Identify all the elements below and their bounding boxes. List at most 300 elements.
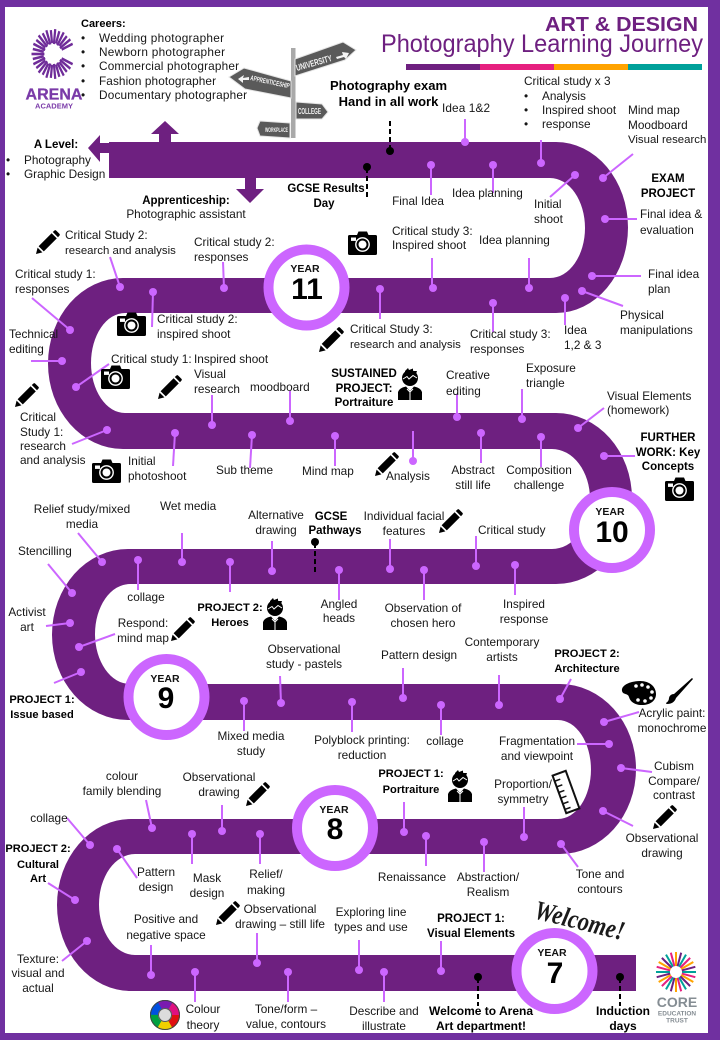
stop: Observational drawing (Year 8) — [183, 770, 255, 835]
stop: Final idea plan — [588, 267, 700, 296]
text block: careers: Documentary photographer — [99, 88, 247, 102]
stop: Critical study 3 inspired shoot: Critical study 3: — [392, 224, 473, 238]
stop: Final idea plan: Final idea — [648, 267, 699, 281]
stop: Colour theory: Colour — [186, 1002, 220, 1016]
stop: Final idea & evaluation: Final idea & — [640, 207, 702, 221]
heading: Sustained Project Portraiture: PROJECT: — [336, 383, 392, 395]
heading: Sustained Project Portraiture: SUSTAINED — [331, 368, 397, 380]
A Level pathway: Graphic Design — [24, 167, 105, 181]
stop: Project 1 Issue based: Issue based — [10, 709, 74, 721]
stop: Inspired shoot, Visual research: Inspired shoot — [194, 352, 268, 366]
stop: Critical study 3 inspired shoot: Inspired shoot — [392, 238, 467, 252]
stop: Cubism Compare/contrast — [617, 759, 701, 802]
stop: Observational study pastels: Observational — [268, 642, 340, 656]
stop: Describe and illustrate — [349, 968, 419, 1033]
stop: Further Work Key Concepts — [600, 432, 701, 473]
Year 10 badge — [574, 492, 650, 568]
stop: Initial photoshoot: photoshoot — [128, 469, 187, 483]
stop: Visual Elements (homework): (homework) — [607, 403, 669, 417]
logo: Arena Academy: ARENA — [26, 86, 83, 104]
icon: camera — [665, 478, 694, 501]
stop: Inspired response: response — [500, 612, 549, 626]
stop: Tone and contours: Tone and — [576, 867, 624, 881]
stop: Final idea plan: plan — [648, 282, 670, 296]
stop: Mind map, Moodboard, Visual research: Visual research — [628, 134, 706, 146]
stop: Inspired response — [500, 561, 549, 626]
stop: Polyblock printing — [314, 698, 410, 762]
milestone: GCSE Results Day: GCSE Results — [287, 183, 365, 195]
stop: Tone and contours — [557, 840, 624, 896]
Year 7 badge: YEAR — [537, 947, 567, 959]
stop: Critical Study 1 research and analysis: Study 1: — [20, 425, 63, 439]
stop: Further Work Key Concepts: FURTHER — [641, 432, 695, 444]
stop: Critical study x 3: Inspired shoot — [542, 103, 617, 117]
stop: Exploring line types and use: types and use — [334, 920, 408, 934]
stop: Polyblock printing: Polyblock printing: — [314, 733, 410, 747]
stop: Cubism Compare/contrast: contrast — [653, 788, 696, 802]
stop: collage (Year 9 bottom) — [426, 701, 464, 748]
stop: Critical study x 3: • — [524, 103, 528, 117]
text block: careers: • — [81, 74, 85, 88]
icon: pencil — [246, 782, 270, 806]
stop: Critical study 2 inspired shoot — [149, 288, 238, 341]
stop: Critical Study 3 research and analysis: research and analysis — [350, 339, 461, 351]
stop: Individual facial features: Individual facial — [364, 509, 444, 523]
Year 11 badge: YEAR — [290, 263, 320, 275]
stop: Exploring line types and use — [334, 905, 408, 974]
stop: collage (Year 8) — [30, 811, 94, 849]
stop: Contemporary artists: artists — [486, 650, 518, 664]
stop: Project 1 Issue based — [9, 668, 85, 721]
icon: pencil — [216, 901, 240, 925]
stop: Idea planning (upper) — [479, 233, 550, 292]
heading: Exam Project: EXAM — [651, 173, 685, 185]
stop: Idea 1,2 & 3: 1,2 & 3 — [564, 338, 602, 352]
stop: Tone/form value, contours: Tone/form – — [255, 1002, 317, 1016]
stop: Stencilling — [18, 544, 76, 597]
stop: Idea planning (upper): Idea planning — [479, 233, 550, 247]
logo: Arena Academy: ACADEMY — [35, 102, 73, 110]
stop: Activist art: art — [20, 620, 35, 634]
stop: Proportion/symmetry — [494, 777, 553, 841]
stop: Abstraction/Realism: Abstraction/ — [457, 870, 519, 884]
stop: Fragmentation and viewpoint — [499, 734, 613, 763]
stop: Relief study/mixed media — [34, 502, 130, 566]
Year 8 badge — [297, 790, 373, 866]
icon: palette — [622, 681, 656, 705]
stop: Project 2 Architecture: PROJECT 2: — [554, 648, 620, 660]
milestone: Photography exam: Photography exam — [330, 78, 447, 93]
heading: Exam Project: PROJECT — [641, 188, 695, 200]
stop: Observational drawing (right) — [599, 807, 698, 860]
stop: Exposure triangle: Exposure — [526, 361, 576, 375]
stop: Individual facial features: features — [383, 524, 425, 538]
stop: Creative editing — [446, 368, 490, 421]
stop: Tone/form value, contours — [246, 968, 326, 1031]
stop: Alternative drawing — [248, 508, 304, 575]
icon: pencil — [36, 230, 60, 254]
stop: Final Idea — [392, 161, 444, 208]
Year 8 badge: YEAR — [319, 804, 349, 816]
stop: collage (Year 9 top) — [127, 556, 165, 604]
icon: camera — [117, 312, 146, 336]
stop: Visual Elements (homework): Visual Elements — [607, 389, 691, 403]
stop: Positive and negative space: negative space — [126, 928, 206, 942]
stop: Angled heads: Angled — [321, 597, 357, 611]
stop: Observational drawing (Year 8): Observational — [183, 770, 255, 784]
stop: colour family blending: family blending — [83, 784, 161, 798]
stop: Observation of chosen hero: Observation of — [385, 601, 461, 615]
stop: Abstract still life: Abstract — [451, 463, 495, 477]
icon: signpost: WORKPLACE — [265, 128, 288, 134]
stop: Project 2 Heroes: PROJECT 2: — [197, 602, 263, 614]
stop: Acrylic paint monochrome: Acrylic paint: — [639, 706, 705, 720]
stop: Technical editing: editing — [9, 342, 44, 356]
stop: Creative editing: editing — [446, 384, 481, 398]
stop: Pattern design (Year 8): design — [139, 880, 173, 894]
icon: person — [398, 368, 422, 400]
text block: careers: Fashion photographer — [99, 74, 216, 88]
stop: Pattern design (Year 8): Pattern — [137, 865, 175, 879]
A Level pathway: • — [6, 167, 10, 181]
milestone: GCSE Pathways: Pathways — [308, 525, 362, 537]
stop: Composition challenge: challenge — [514, 478, 565, 492]
title: Photography Learning Journey — [381, 30, 703, 58]
stop: Idea planning: Idea planning — [452, 186, 523, 200]
A Level pathway: A Level: — [34, 139, 78, 151]
stop: Cubism Compare/contrast: Cubism — [654, 759, 694, 773]
stop: Critical study 2 inspired shoot: inspired shoot — [157, 327, 231, 341]
stop: Project 2 Heroes — [197, 558, 263, 629]
stop: Analysis: Analysis — [386, 469, 430, 483]
stop: Observation of chosen hero — [385, 566, 462, 630]
text block: careers: Commercial photographer — [99, 59, 239, 73]
stop: Mind map, Moodboard, Visual research: Mind map — [628, 103, 680, 117]
milestone: Induction days — [596, 973, 650, 1033]
stop: Critical study 2 inspired shoot: Critical study 2: — [157, 312, 238, 326]
Welcome script: Welcome! — [532, 895, 628, 946]
Year 10 badge: YEAR — [595, 506, 625, 518]
text block: careers — [81, 18, 247, 102]
stop: Inspired response: Inspired — [503, 597, 545, 611]
Apprenticeship pathway: Photographic assistant — [126, 207, 246, 221]
text block: careers: • — [81, 88, 85, 102]
title: ART & DESIGN — [545, 13, 698, 36]
icon: signpost: APPRENTICESHIP — [250, 75, 290, 90]
stop: Sub theme: Sub theme — [216, 463, 273, 477]
stop: Renaissance — [378, 832, 447, 884]
arrow: to A Level — [88, 135, 110, 162]
icon: pencil — [439, 509, 463, 533]
stop: Wet media: Wet media — [160, 499, 217, 513]
stop: Inspired shoot, Visual research: Visual — [194, 367, 226, 381]
stop: Observational drawing still life — [235, 902, 325, 967]
stop: Project 2 Cultural Art: PROJECT 2: — [5, 843, 71, 855]
milestone: GCSE Results Day: Day — [313, 198, 335, 210]
stop: Idea planning — [452, 161, 523, 200]
stop: Relief study/mixed media: media — [66, 517, 98, 531]
stop: Composition challenge — [506, 433, 572, 492]
stop: Relief study/mixed media: Relief study/mixed — [34, 502, 130, 516]
arrow: to careers — [151, 121, 179, 143]
stop: Wet media — [160, 499, 217, 566]
stop: Observational drawing still life: Observational — [244, 902, 316, 916]
Year 7 badge: 7 — [547, 957, 563, 990]
icon: colour wheel — [150, 1000, 180, 1030]
stop: Individual facial features — [364, 509, 444, 573]
stop: Respond mind map: mind map — [117, 631, 169, 645]
milestone: Photography exam: Hand in all work — [339, 94, 439, 109]
stop: Acrylic paint monochrome: monochrome — [638, 721, 707, 735]
stop: Positive and negative space: Positive and — [134, 912, 198, 926]
icon: camera — [92, 460, 121, 483]
stop: Initial shoot: shoot — [534, 212, 564, 226]
stop: Critical study 1 inspired shoot: Critical study 1: — [111, 352, 192, 366]
stop: Exploring line types and use: Exploring line — [336, 905, 406, 919]
stop: Texture visual and actual: visual and — [11, 966, 65, 980]
stop: Critical study x 3: response — [542, 117, 591, 131]
stop: Tone/form value, contours: value, contours — [246, 1017, 326, 1031]
stop: Physical manipulations: Physical — [620, 308, 664, 322]
A Level pathway — [6, 139, 105, 181]
text block: careers: Newborn photographer — [99, 45, 225, 59]
icon: camera — [348, 232, 377, 255]
stop: Critical study x 3: • — [524, 89, 528, 103]
stop: Critical Study 1 research and analysis: Critical — [20, 410, 56, 424]
stop: Describe and illustrate: illustrate — [362, 1019, 406, 1033]
stop: Tone and contours: contours — [577, 882, 623, 896]
stop: Critical study 2 responses: Critical study 2: — [194, 235, 275, 249]
stop: Project 1 Portraiture: PROJECT 1: — [378, 768, 444, 780]
stop: Mind map, Moodboard, Visual research — [599, 103, 706, 182]
stop: Observational study pastels: study - pastels — [266, 657, 342, 671]
stop: Relief/making: Relief/ — [249, 867, 283, 881]
Year 10 badge: 10 — [595, 516, 629, 549]
stop: Mask design: Mask — [193, 871, 221, 885]
arrow: to apprenticeship — [236, 177, 264, 203]
Year 9 badge — [128, 659, 204, 735]
stop: Critical Study 2 research and analysis — [65, 228, 176, 291]
stop: Mask design — [188, 830, 224, 900]
stop: Fragmentation and viewpoint: and viewpoint — [501, 749, 574, 763]
stop: Critical study 3 responses: Critical study 3: — [470, 327, 551, 341]
stop: Observational drawing (Year 8): drawing — [198, 785, 240, 799]
Year 9 badge: 9 — [158, 682, 174, 715]
stop: Inspired shoot, Visual research: research — [194, 382, 240, 396]
icon: paint brush — [666, 678, 693, 704]
icon: signpost: UNIVERSITY — [295, 53, 333, 73]
stop: Critical study 1 responses: responses — [15, 282, 70, 296]
icon: person — [448, 770, 472, 802]
logo: Core Education Trust: TRUST — [666, 1018, 688, 1024]
stop: Proportion/symmetry: symmetry — [497, 792, 549, 806]
stop: Mixed media study: study — [237, 744, 265, 758]
stop: Relief/making — [247, 830, 285, 897]
stop: Critical study 3 inspired shoot — [392, 224, 473, 292]
stop: Visual Elements (homework) — [574, 389, 691, 432]
stop: Composition challenge: Composition — [506, 463, 572, 477]
icon: signpost — [229, 42, 356, 138]
stop: Project 1 Visual Elements: Visual Elements — [427, 928, 515, 940]
stop: Abstraction/Realism — [457, 838, 520, 899]
icon: pencil — [319, 327, 344, 352]
stop: Abstraction/Realism: Realism — [467, 885, 509, 899]
stop: Texture visual and actual — [11, 937, 91, 995]
icon: pencil — [158, 375, 182, 399]
stop: Idea 1&2: Idea 1&2 — [442, 101, 490, 115]
stop: Alternative drawing: drawing — [255, 523, 297, 537]
A Level pathway: • — [6, 153, 10, 167]
stop: Project 1 Visual Elements — [427, 913, 515, 975]
stop: Angled heads: heads — [323, 611, 355, 625]
text block: careers: • — [81, 45, 85, 59]
stop: Critical study 2 responses: responses — [194, 250, 249, 264]
stop: Creative editing: Creative — [446, 368, 490, 382]
stop: Observational drawing still life: drawing – still life — [235, 917, 325, 931]
stop: Critical study 3 responses: responses — [470, 342, 525, 356]
logo: Arena Academy — [26, 29, 83, 110]
text block: careers: Wedding photographer — [99, 31, 224, 45]
text block: careers: • — [81, 31, 85, 45]
stop: Technical editing — [9, 327, 66, 365]
stop: collage (Year 9 top): collage — [127, 590, 165, 604]
stop: Stencilling: Stencilling — [18, 544, 72, 558]
milestone: Induction days: days — [609, 1019, 637, 1033]
stop: Alternative drawing: Alternative — [248, 508, 304, 522]
Year 8 badge: 8 — [327, 813, 343, 846]
stop: Inspired shoot, Visual research — [194, 352, 269, 429]
stop: Critical Study 3 research and analysis: Critical Study 3: — [350, 322, 433, 336]
stop: Physical manipulations — [578, 287, 693, 337]
stop: Renaissance: Renaissance — [378, 870, 447, 884]
stop: colour family blending — [83, 769, 161, 832]
stop: Relief/making: making — [247, 883, 285, 897]
stop: Critical study 3 responses — [470, 299, 551, 356]
stop: Sub theme — [216, 431, 273, 477]
stop: Colour theory: theory — [187, 1018, 219, 1032]
stop: Final idea & evaluation — [601, 207, 702, 237]
stop: Texture visual and actual: Texture: — [17, 952, 59, 966]
stop: Project 2 Cultural Art: Cultural — [17, 859, 59, 871]
logo: Core Education Trust: CORE — [657, 994, 697, 1010]
milestone: Welcome to Arena Art department — [429, 973, 533, 1033]
stop: Colour theory — [186, 968, 220, 1032]
icon: camera — [101, 366, 130, 389]
stop: Critical Study 2 research and analysis: research and analysis — [65, 245, 176, 257]
stop: Contemporary artists — [465, 635, 539, 709]
milestone: Welcome to Arena Art department: Welcome to Arena — [429, 1004, 533, 1018]
icon: signpost: COLLEGE — [298, 107, 321, 116]
stop: Critical study 1 responses — [15, 267, 96, 334]
stop: Critical Study 1 research and analysis — [20, 410, 111, 467]
stop: Project 2 Architecture — [554, 648, 620, 703]
stop: Mind map: Mind map — [302, 464, 354, 478]
icon: ruler — [553, 771, 579, 813]
stop: Pattern design (Year 9): Pattern design — [381, 648, 457, 662]
stop: Project 1 Portraiture: Portraiture — [383, 784, 439, 796]
stop: Project 2 Heroes: Heroes — [211, 617, 249, 629]
milestone: GCSE Pathways: GCSE — [315, 511, 347, 523]
stop: Final idea & evaluation: evaluation — [640, 223, 694, 237]
stop: moodboard: moodboard — [250, 380, 310, 394]
stop: Pattern design (Year 8) — [113, 845, 175, 894]
stop: Mask design: design — [190, 886, 224, 900]
stop: Physical manipulations: manipulations — [620, 323, 693, 337]
Year 9 badge: YEAR — [150, 673, 180, 685]
stop: Project 2 Cultural Art: Art — [30, 873, 46, 885]
Year 11 badge: 11 — [291, 273, 323, 306]
icon: pencil — [375, 452, 399, 476]
stop: Idea 1,2 & 3 — [561, 294, 602, 352]
learning journey ribbon — [48, 142, 636, 991]
stop: Critical Study 3 research and analysis — [350, 285, 461, 351]
stop: Pattern design (Year 9) — [381, 648, 457, 702]
stop: Idea 1,2 & 3: Idea — [564, 323, 587, 337]
title — [381, 13, 703, 58]
Year 11 badge — [268, 250, 344, 326]
stop: Describe and illustrate: Describe and — [349, 1004, 419, 1018]
stop: Mixed media study: Mixed media — [218, 729, 284, 743]
stop: Proportion/symmetry: Proportion/ — [494, 777, 552, 791]
Year 7 badge — [516, 933, 592, 1009]
Apprenticeship pathway: Apprenticeship: — [142, 195, 230, 207]
stop: Mixed media study — [218, 697, 285, 758]
stop: Exposure triangle — [518, 361, 576, 423]
stop: colour family blending: colour — [106, 769, 138, 783]
icon: person — [263, 598, 287, 630]
stop: Abstract still life — [451, 429, 495, 492]
stop: Texture visual and actual: actual — [22, 981, 54, 995]
stop: Respond mind map — [75, 616, 169, 651]
stop: Respond mind map: Respond: — [118, 616, 168, 630]
stop: Observational drawing (right): drawing — [641, 846, 683, 860]
A Level pathway: Photography — [24, 153, 91, 167]
icon: pencil — [15, 383, 39, 407]
stop: Critical study 1 inspired shoot — [72, 352, 192, 391]
stop: Exposure triangle: triangle — [526, 376, 565, 390]
stop: Initial shoot: Initial — [534, 197, 562, 211]
stop: collage (Year 8): collage — [30, 811, 68, 825]
heading: Sustained Project Portraiture: Portraiture — [335, 397, 393, 409]
stop: Further Work Key Concepts: WORK: Key — [636, 447, 701, 459]
stop: Project 1 Issue based: PROJECT 1: — [9, 694, 75, 706]
stop: Critical study 2 responses — [194, 235, 275, 292]
stop: Critical study x 3: Critical study x 3 — [524, 74, 611, 88]
stop: Further Work Key Concepts: Concepts — [642, 461, 694, 473]
stop: collage (Year 9 bottom): collage — [426, 734, 464, 748]
stop: Critical study — [472, 523, 546, 570]
stop: Activist art — [8, 605, 74, 634]
stop: Observation of chosen hero: chosen hero — [391, 616, 456, 630]
stop: Contemporary artists: Contemporary — [465, 635, 539, 649]
stop: Initial photoshoot — [128, 429, 187, 483]
stop: Fragmentation and viewpoint: Fragmentation — [499, 734, 575, 748]
text block: careers: Careers: — [81, 18, 126, 30]
stop: Analysis — [386, 431, 430, 483]
stop: Critical study: Critical study — [478, 523, 546, 537]
stop: Cubism Compare/contrast: Compare/ — [648, 774, 701, 788]
stop: moodboard — [250, 380, 310, 425]
stop: Observational drawing (right): Observational — [626, 831, 698, 845]
stop: Acrylic paint monochrome — [600, 706, 707, 735]
text block: careers: • — [81, 59, 85, 73]
colour bar — [406, 64, 702, 70]
stop: Activist art: Activist — [8, 605, 46, 619]
logo: Core Education Trust: EDUCATION — [658, 1010, 696, 1018]
logo: Core Education Trust — [656, 952, 697, 1024]
stop: Polyblock printing: reduction — [338, 748, 386, 762]
stop: Final Idea: Final Idea — [392, 194, 444, 208]
